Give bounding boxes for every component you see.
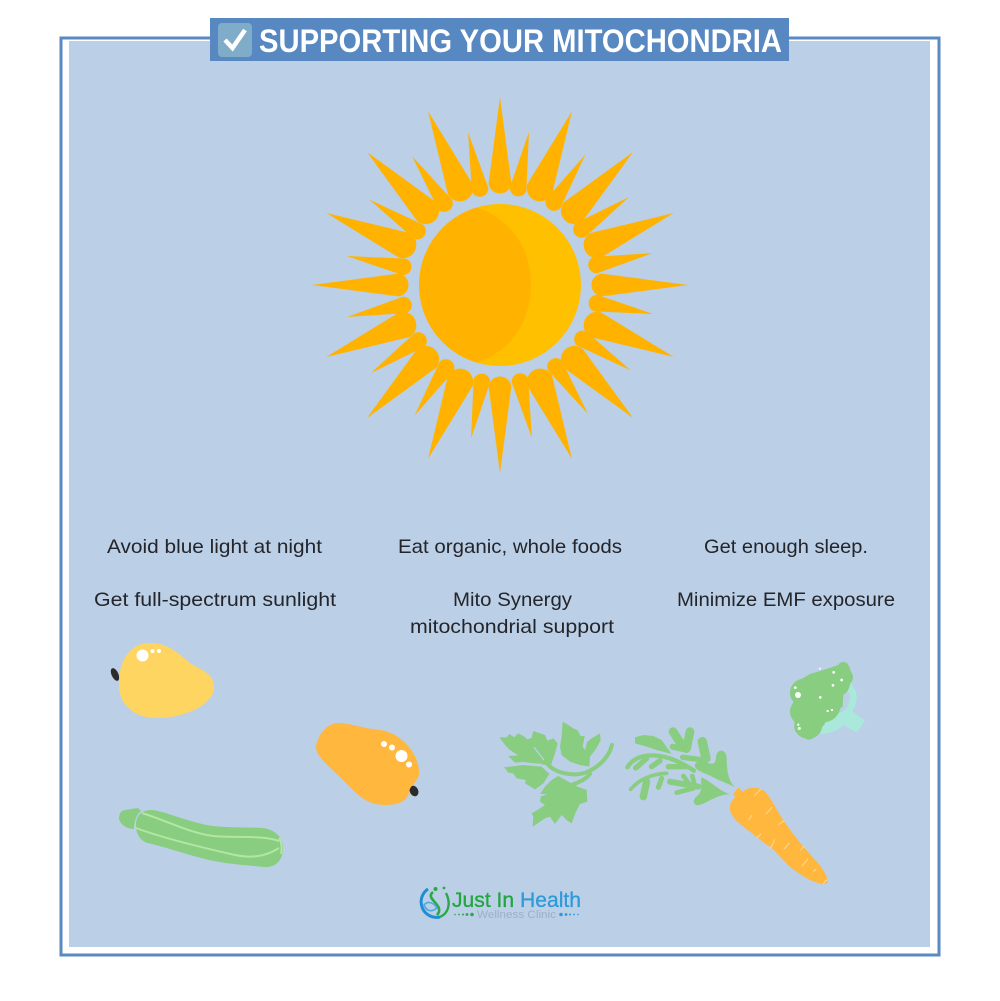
icon: carrot (627, 732, 828, 884)
parsley leaf: upper left (499, 731, 558, 766)
carrot highlights (749, 789, 827, 884)
parsley leaf: lower left (504, 765, 549, 789)
text: column 3: Minimize EMF exposure (677, 589, 895, 611)
text: column 2 (398, 536, 622, 638)
sun long rays (312, 97, 688, 473)
broccoli stem (818, 709, 865, 734)
carrot stem (733, 787, 742, 799)
logo dots (454, 913, 579, 916)
text: column 2: Mito Synergy (453, 589, 572, 611)
parsley stem (548, 745, 612, 785)
logo (421, 887, 581, 921)
title banner (210, 18, 789, 61)
text: column 3: Get enough sleep. (704, 536, 868, 558)
title: SUPPORTING YOUR MITOCHONDRIA (259, 23, 782, 59)
carrot body (730, 788, 828, 884)
parsley leaf slit (513, 747, 544, 764)
icon: sun (312, 97, 688, 473)
logo mark (421, 887, 449, 917)
text: column 2: mitochondrial support (410, 616, 615, 638)
logo tagline: Wellness Clinic (477, 909, 557, 921)
text: column 3 (677, 536, 895, 611)
icon: checkbox (218, 23, 252, 57)
logo wordmark: Just In Health (452, 889, 581, 912)
sun inner shade (419, 208, 531, 362)
panel: background (69, 41, 930, 947)
parsley leaf: bottom (532, 776, 587, 827)
icon: broccoli (790, 662, 865, 740)
text: column 1 (94, 536, 337, 611)
broccoli highlights (794, 668, 843, 730)
text: column 1: Avoid blue light at night (107, 536, 323, 558)
parsley leaf: top (560, 722, 601, 767)
carrot leaves (627, 732, 735, 805)
text: column 2: Eat organic, whole foods (398, 536, 622, 558)
icon: yellow mango (109, 643, 214, 718)
icon: parsley (499, 722, 612, 827)
icon: orange mango (316, 723, 420, 805)
text: column 1: Get full-spectrum sunlight (94, 589, 337, 611)
broccoli florets (790, 662, 853, 740)
sun short rays (345, 130, 655, 440)
icon: zucchini (119, 808, 283, 867)
sun disc (419, 204, 581, 366)
